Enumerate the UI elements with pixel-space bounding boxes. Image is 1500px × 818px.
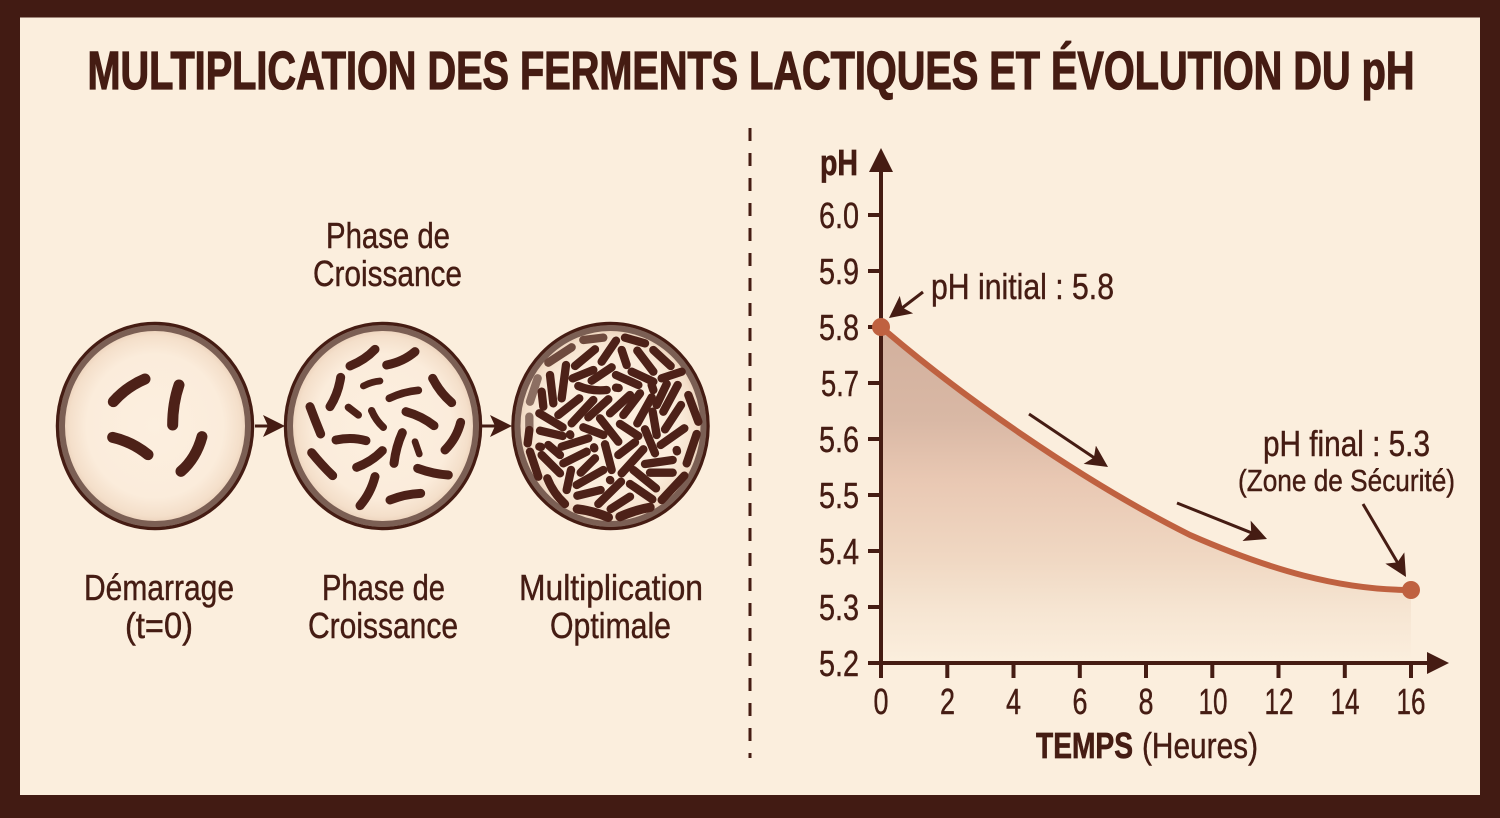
divider [748,128,752,758]
label: multiplication optimale [519,567,703,646]
panel: pH chart [819,142,1455,766]
label: demarrage [84,567,234,646]
label: demarrage: (t=0) [125,605,193,646]
callout: initial pH [900,266,1114,310]
arrow: growth to optimal [482,424,498,428]
callout: final pH: (Zone de Sécurité) [1238,463,1455,498]
heading: phase de croissance: Croissance [313,253,462,294]
x axis labels: 10 [1198,681,1228,722]
arrow: start to growth [255,424,271,428]
callout: final pH [1238,423,1455,565]
label: multiplication optimale: Optimale [550,605,671,646]
label: demarrage: Démarrage [84,567,234,608]
petri dish: start [58,324,252,528]
x axis labels [874,681,1426,722]
y axis [868,148,893,663]
x axis labels: 6 [1072,681,1088,722]
x axis title: (Heures) [1142,725,1258,766]
y axis labels: 5.2 [819,643,859,684]
x axis labels: 8 [1138,681,1154,722]
heading: phase de croissance [313,215,462,294]
x axis labels: 0 [874,681,888,722]
label: phase de croissance: Croissance [308,605,458,646]
y axis labels: 6.0 [819,195,859,236]
arrow: trend 1 [1029,414,1096,459]
x axis labels: 2 [940,681,955,722]
label: phase de croissance [308,567,458,646]
pH curve [881,327,1411,590]
y axis labels: 5.9 [819,251,859,292]
callout: initial pH: pH initial : 5.8 [931,266,1114,307]
y axis labels: 5.5 [819,475,859,516]
x axis labels: 12 [1264,681,1294,722]
x axis labels: 16 [1396,681,1426,722]
x axis [868,652,1449,678]
y axis labels: 5.3 [819,587,859,628]
arrow: trend 2 [1177,503,1254,534]
y axis labels [819,195,859,684]
x axis labels: 14 [1330,681,1360,722]
y axis labels: 5.6 [819,419,859,460]
start point [872,318,890,336]
label: multiplication optimale: Multiplication [519,567,703,608]
petri dish: growth [286,324,480,528]
x axis title: TEMPS [1036,725,1133,766]
panel: bacterial growth [58,215,708,646]
heading: phase de croissance: Phase de [326,215,450,256]
x axis labels: 4 [1006,681,1021,722]
y axis labels: 5.7 [821,363,859,404]
end point [1402,581,1420,599]
y axis title: pH [820,142,858,183]
y axis labels: 5.8 [819,307,859,348]
label: phase de croissance: Phase de [322,567,445,608]
petri dish: optimal [513,324,708,528]
y axis labels: 5.4 [819,531,859,572]
callout: final pH: pH final : 5.3 [1263,423,1430,464]
chart area fill [883,330,1411,661]
x axis title [1036,725,1258,766]
